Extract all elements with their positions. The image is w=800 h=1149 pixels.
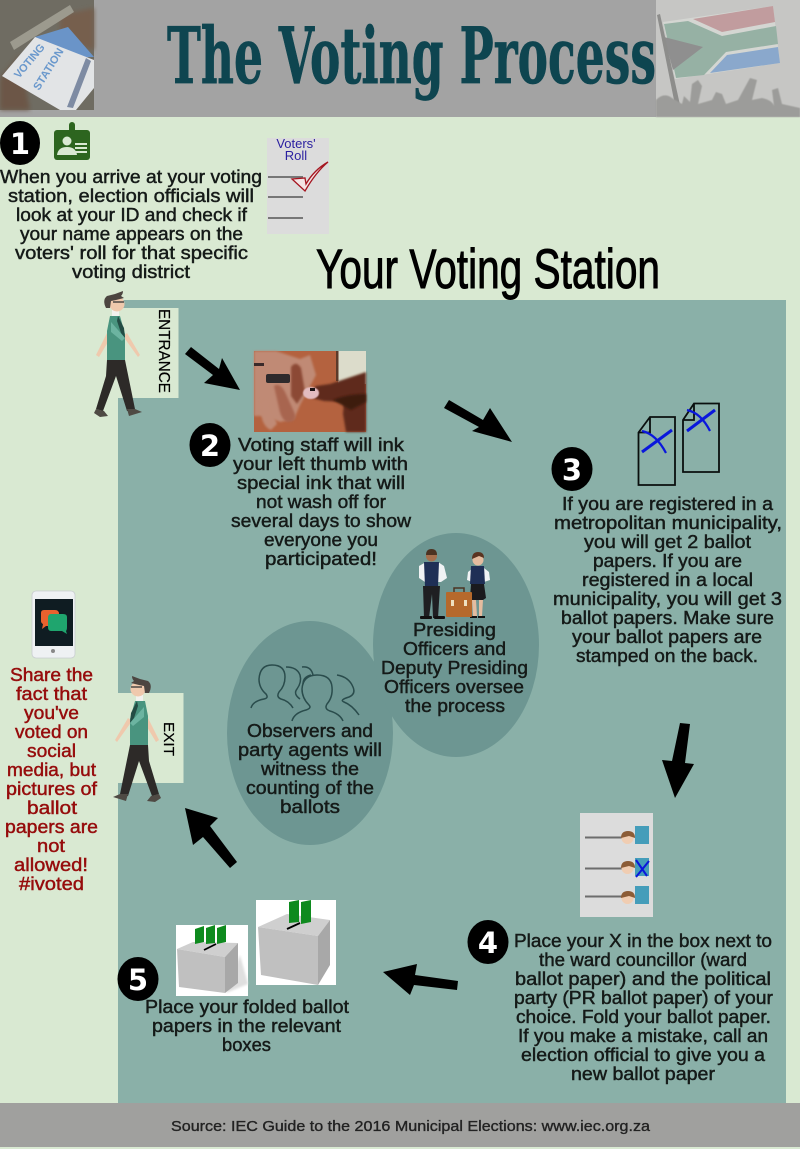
social media note: Share the	[10, 665, 93, 685]
step 1 text: When you arrive at your voting	[0, 167, 262, 187]
arrow: inking to ballots	[444, 400, 512, 442]
social media note: pictures of	[6, 779, 98, 799]
step 5 text: papers in the relevant	[152, 1016, 341, 1036]
step 2 text: your left thumb with	[233, 454, 408, 474]
icon: ballot box for three papers	[176, 925, 248, 996]
panel: entrance: ENTRANCE	[155, 309, 172, 393]
photo: voting station sign	[0, 0, 94, 110]
step 5 text: boxes	[222, 1035, 271, 1055]
photo: South African flag and crowd	[656, 0, 800, 117]
step 1 text: look at your ID and check if	[16, 205, 248, 225]
step 3 text: ballot papers. Make sure	[561, 608, 774, 628]
step 1 text: voters' roll for that specific	[15, 243, 248, 263]
step 3 text: municipality, you will get 3	[553, 589, 782, 609]
step 1 number badge: 1	[10, 127, 30, 161]
icon: observers group	[251, 665, 359, 721]
panel: observers ellipse	[227, 621, 393, 845]
arrow: down to marking	[662, 723, 694, 798]
social media note: papers are	[5, 817, 98, 837]
observers text: witness the	[260, 759, 359, 779]
step 4 text: election official to give you a	[521, 1045, 766, 1065]
icon: voters' roll: Roll	[285, 148, 307, 163]
icon: ID card	[54, 122, 90, 160]
social media note: voted on	[15, 722, 88, 742]
step 4 text: choice. Fold your ballot paper.	[516, 1007, 771, 1027]
arrow: marking to ballot boxes	[383, 964, 458, 995]
step 3 number badge: 3	[562, 453, 582, 487]
icon: phone with chat bubbles	[32, 591, 75, 658]
social media note: allowed!	[14, 855, 88, 875]
step 4 text: party (PR ballot paper) of your	[514, 988, 773, 1008]
step 4 number badge: 4	[478, 926, 498, 960]
social media note: social	[27, 741, 76, 761]
step 5 number badge: 5	[128, 963, 148, 997]
panel: exit	[118, 693, 184, 783]
icon: two ballot papers	[638, 404, 719, 485]
presiding officers text: Deputy Presiding	[381, 658, 528, 678]
step 1 text: your name appears on the	[20, 224, 243, 244]
social media note: fact that	[16, 684, 87, 704]
social media note: not	[37, 836, 65, 856]
step 5 number badge	[118, 957, 158, 1001]
step 3 text: your ballot papers are	[572, 627, 762, 647]
footer band	[0, 1103, 800, 1147]
step 4 text: Place your X in the box next to	[514, 931, 772, 951]
step 3 text: you will get 2 ballot	[584, 532, 751, 552]
step 3 text: registered in a local	[582, 570, 753, 590]
step 1 text: voting district	[72, 262, 190, 282]
step 1 text	[0, 167, 262, 282]
observers text: party agents will	[238, 740, 382, 760]
step 1 text: station, election officials will	[8, 186, 254, 206]
panel: voting station floor	[118, 300, 786, 1103]
step 4 text	[514, 931, 773, 1084]
step 3 text	[553, 494, 782, 666]
source text: Source: IEC Guide to the 2016 Municipal Elections: www.iec.org.za	[171, 1118, 651, 1135]
step 2 text: participated!	[265, 549, 377, 569]
step 4 text: If you make a mistake, call an	[518, 1026, 768, 1046]
figure: voter entering	[94, 291, 142, 417]
observers text: counting of the	[246, 778, 374, 798]
figure: voter exiting	[113, 676, 161, 802]
presiding officers text: Presiding	[413, 620, 496, 640]
observers text: ballots	[280, 797, 340, 817]
step 5 text	[145, 997, 349, 1055]
heading: your voting station: Your Voting Station	[316, 237, 660, 300]
presiding officers text: Officers oversee	[384, 677, 524, 697]
social media note: ballot	[27, 798, 77, 818]
icon: ballot paper with candidates	[580, 813, 653, 917]
step 2 text: Voting staff will ink	[238, 435, 405, 455]
step 2 number badge	[190, 423, 230, 467]
step 4 text: new ballot paper	[571, 1064, 715, 1084]
header band	[0, 0, 800, 117]
step 5 text: Place your folded ballot	[145, 997, 349, 1017]
icon: voters' roll: Voters'	[276, 136, 316, 151]
presiding officers text: the process	[405, 696, 505, 716]
arrow: to exit	[185, 808, 237, 868]
step 2 text: several days to show	[231, 511, 412, 531]
panel: presiding officers ellipse	[373, 533, 539, 757]
step 3 text: papers. If you are	[593, 551, 742, 571]
social media note: you've	[24, 703, 79, 723]
presiding officers text: Officers and	[403, 639, 506, 659]
step 2 text: not wash off for	[256, 492, 386, 512]
step 4 text: ballot paper) and the political	[515, 969, 771, 989]
step 3 text: stamped on the back.	[576, 646, 758, 666]
photo: voting station sign: STATION	[31, 46, 66, 93]
step 2 text: special ink that will	[237, 473, 405, 493]
icon: presiding officers and briefcase	[419, 549, 490, 619]
icon: voters' roll	[267, 136, 329, 234]
panel: exit: EXIT	[160, 722, 177, 756]
panel: entrance	[118, 308, 178, 398]
step 4 text: the ward councillor (ward	[539, 950, 747, 970]
step 1 number badge	[0, 121, 40, 165]
icon: ballot box for two papers	[256, 900, 336, 985]
step 3 text: metropolitan municipality,	[554, 513, 782, 533]
step 2 number badge: 2	[200, 429, 220, 463]
step 4 number badge	[468, 920, 508, 964]
photo: voting station sign: VOTING	[12, 42, 48, 81]
step 3 text: If you are registered in a	[562, 494, 774, 514]
presiding officers text	[381, 620, 528, 716]
social media note: media, but	[7, 760, 96, 780]
step 2 text	[231, 435, 412, 569]
step 2 text: everyone you	[264, 530, 378, 550]
arrow: entrance to inking	[185, 347, 240, 390]
observers text: Observers and	[247, 721, 373, 741]
step 3 number badge	[552, 447, 592, 491]
social media note	[5, 665, 98, 894]
observers text	[238, 721, 382, 817]
social media note: #ivoted	[19, 874, 84, 894]
photo: inked thumb	[254, 351, 366, 432]
